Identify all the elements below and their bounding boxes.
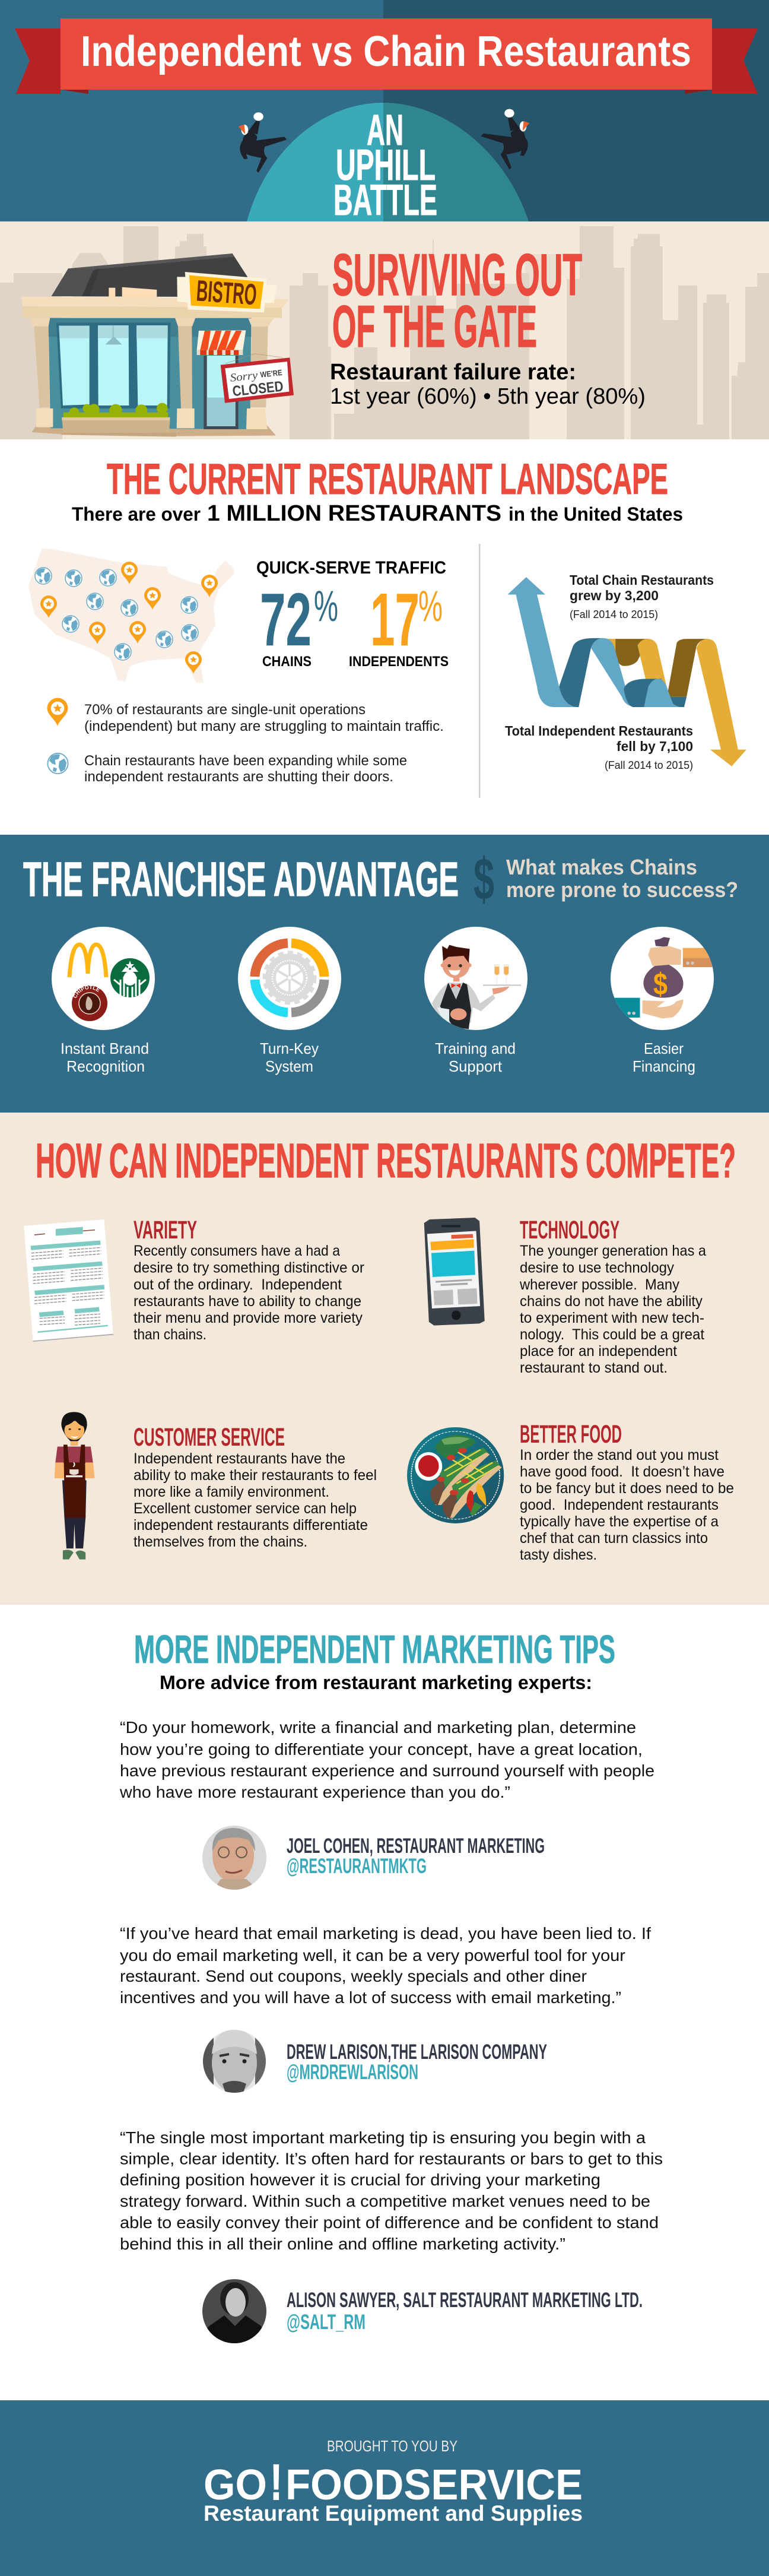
text block: failure rate: 1st year (60%) • 5th year (80%) — [330, 384, 646, 409]
text block: independent restaurants fell: Total Independent Restaurants — [505, 723, 693, 739]
heading: customer service: CUSTOMER SERVICE — [134, 1423, 285, 1452]
closed sign — [221, 357, 294, 403]
avatar: drew larison — [203, 2030, 266, 2093]
quote: alison sawyer: simple, clear identity. It’s often hard for restaurants or bars to get to this — [120, 2149, 663, 2168]
text block: customer service: Independent restaurants have the — [134, 1450, 345, 1467]
text block: technology: restaurant to stand out. — [520, 1360, 668, 1376]
quote: drew larison: restaurant. Send out coupons, weekly specials and other diner — [120, 1967, 587, 1985]
caption: easier financing: Financing — [633, 1057, 695, 1075]
text block: better food: In order the stand out you must — [520, 1447, 719, 1463]
quote: alison sawyer: strategy forward. Within such a competitive market venues need to be — [120, 2192, 650, 2210]
byline: joel cohen — [287, 1834, 545, 1878]
planter with bushes — [63, 403, 168, 419]
stat: 17% independents — [349, 578, 449, 670]
byline: drew larison — [287, 2040, 547, 2084]
caption: easier financing — [633, 1040, 695, 1075]
subheading: over 1 million restaurants — [72, 501, 683, 526]
hill text: an uphill battle: AN — [367, 106, 403, 154]
text block: single-unit operations: 70% of restaurants are single-unit operations — [84, 702, 366, 718]
text block: customer service: themselves from the chains. — [134, 1533, 307, 1550]
text block: better food — [520, 1447, 734, 1563]
text block: technology: place for an independent — [520, 1343, 677, 1360]
text block: independent restaurants fell: (Fall 2014 to 2015) — [605, 759, 693, 771]
quote: joel cohen: how you’re going to differentiate your concept, have a great location, — [120, 1740, 643, 1758]
text block: customer service — [134, 1450, 377, 1550]
first taco — [430, 1447, 490, 1506]
text block: independent restaurants fell: fell by 7,100 — [617, 739, 693, 754]
title text: Independent vs Chain Restaurants — [81, 28, 691, 75]
stat: 72% chains: % — [314, 582, 338, 630]
panel: surviving out of the gate background — [0, 221, 769, 439]
panel: how can independents compete — [0, 1113, 769, 1605]
text block: variety: restaurants have to ability to change — [134, 1293, 361, 1310]
icon: waiter with tray — [424, 927, 528, 1030]
caption: instant brand recognition — [61, 1040, 149, 1075]
icon: globe legend — [47, 753, 68, 774]
text: brought to you by: BROUGHT TO YOU BY — [327, 2437, 457, 2455]
panel: franchise advantage — [0, 835, 769, 1113]
stat: 72% chains: 72 — [260, 578, 312, 661]
text block: chains expanding: independent restaurants are shutting their doors. — [84, 769, 393, 785]
quote: alison sawyer — [120, 2128, 663, 2253]
text block: technology: to experiment with new tech- — [520, 1310, 704, 1326]
text block: customer service: more like a family environment. — [134, 1484, 329, 1500]
text block: better food: have good food. It doesn’t have — [520, 1463, 724, 1480]
bistro sign — [177, 272, 277, 312]
subheading: what makes chains: What makes Chains — [506, 855, 697, 879]
avatar: alison sawyer — [202, 2279, 266, 2343]
quote: drew larison — [120, 1924, 651, 2007]
caption: easier financing: Easier — [644, 1040, 684, 1057]
byline: alison sawyer: @SALT_RM — [287, 2311, 366, 2334]
quote: drew larison: “If you’ve heard that email marketing is dead, you have been lied to. If — [120, 1924, 651, 1943]
text block: independent restaurants fell — [505, 723, 693, 771]
byline: joel cohen: JOEL COHEN, RESTAURANT MARKETING — [287, 1834, 545, 1858]
text block: failure rate — [330, 360, 646, 409]
second taco — [443, 1460, 502, 1519]
subheading: more advice: More advice from restaurant marketing experts: — [160, 1672, 592, 1693]
quote: alison sawyer: “The single most important marketing tip is ensuring you begin with a — [120, 2128, 646, 2147]
stat: quick-serve traffic: QUICK-SERVE TRAFFIC — [256, 558, 446, 578]
byline: joel cohen: @RESTAURANTMKTG — [287, 1855, 427, 1878]
quote: drew larison: you do email marketing well, it can be a very powerful tool for your — [120, 1946, 625, 1965]
logo: go foodservice: GO — [204, 2461, 267, 2509]
text block: chain restaurants grew: Total Chain Restaurants — [570, 572, 714, 588]
text block: chains expanding — [84, 753, 407, 785]
logo: go foodservice: Restaurant Equipment and Supplies — [204, 2501, 583, 2526]
quote: alison sawyer: able to easily convey their point of difference and be confident to stand — [120, 2213, 659, 2232]
stat: 17% independents: % — [418, 582, 443, 630]
heading: variety: VARIETY — [134, 1216, 197, 1244]
icon: menu — [24, 1219, 114, 1342]
text block: chain restaurants grew: (Fall 2014 to 2015) — [570, 609, 658, 620]
heading: the franchise advantage: THE FRANCHISE ADVANTAGE — [23, 853, 459, 907]
caption: training and support — [435, 1040, 516, 1075]
caption: instant brand recognition: Recognition — [66, 1057, 145, 1075]
byline: alison sawyer — [287, 2289, 643, 2334]
stat: quick-serve traffic — [256, 558, 449, 670]
avatar: joel cohen — [202, 1826, 266, 1890]
icon: dollar sign: $ — [474, 846, 494, 912]
stat: 72% chains: CHAINS — [262, 654, 312, 670]
text block: technology: The younger generation has a — [520, 1243, 706, 1259]
text block: single-unit operations — [84, 702, 444, 734]
text block: better food: to be fancy but it does need to be — [520, 1480, 734, 1497]
caption: training and support: Training and — [435, 1040, 516, 1057]
text block: better food: typically have the expertise of a — [520, 1513, 719, 1530]
byline: drew larison: @MRDREWLARISON — [287, 2061, 418, 2084]
stat: 17% independents: INDEPENDENTS — [349, 654, 449, 670]
heading: surviving out of the gate: OF THE GATE — [332, 293, 537, 359]
byline: drew larison: DREW LARISON,THE LARISON COMPANY — [287, 2040, 547, 2064]
caption: turn-key system: System — [265, 1057, 313, 1075]
columns — [29, 318, 274, 429]
text block: better food: tasty dishes. — [520, 1547, 597, 1563]
hill — [247, 103, 529, 221]
closed sign: WE'RE — [260, 368, 282, 379]
map: united states with pins and globes — [28, 549, 234, 683]
illustration: waitress with coffee — [55, 1412, 94, 1560]
text block: technology: desire to use technology — [520, 1260, 674, 1276]
illustration: plate of tacos — [407, 1427, 504, 1523]
quote: joel cohen: “Do your homework, write a financial and marketing plan, determine — [120, 1718, 636, 1737]
icon: climbing waiter left — [239, 112, 287, 173]
text block: variety — [134, 1243, 364, 1343]
text block: single-unit operations: (independent) but many are struggling to maintain traffic. — [84, 718, 444, 734]
subheading: over 1 million restaurants: There are over — [72, 503, 201, 525]
caption: instant brand recognition: Instant Brand — [61, 1040, 149, 1057]
text block: variety: Recently consumers have a had a — [134, 1243, 340, 1259]
quote: alison sawyer: behind this in all their online and offline marketing activity.” — [120, 2235, 565, 2253]
logo: go foodservice: ! — [271, 2454, 282, 2510]
text block: customer service: ability to make their restaurants to feel — [134, 1467, 377, 1484]
stat: 17% independents: 17 — [370, 578, 420, 661]
chart: rising and falling ribbon arrows — [507, 577, 746, 766]
text block: chains expanding: Chain restaurants have been expanding while some — [84, 753, 407, 769]
quote: joel cohen: have previous restaurant experience and surround yourself with people — [120, 1761, 654, 1780]
roof — [52, 254, 247, 297]
quote: alison sawyer: defining position however it is crucial for driving your marketing — [120, 2171, 600, 2189]
awning — [197, 330, 246, 355]
subheading: what makes chains: more prone to success? — [506, 877, 738, 902]
illustration: closed bistro storefront — [21, 254, 294, 437]
text block: variety: than chains. — [134, 1326, 206, 1343]
text block: variety: their menu and provide more variety — [134, 1310, 363, 1326]
icon: brand logos — [52, 927, 155, 1030]
hill text: an uphill battle: UPHILL — [336, 141, 436, 189]
closed sign: Sorry — [230, 369, 259, 385]
text block: technology: wherever possible. Many — [519, 1276, 679, 1293]
caption: turn-key system: Turn-Key — [260, 1040, 319, 1057]
icon: smartphone — [424, 1218, 485, 1326]
text block: chain restaurants grew: grew by 3,200 — [570, 588, 659, 603]
closed sign: CLOSED — [231, 379, 284, 400]
door — [204, 356, 239, 429]
heading: technology: TECHNOLOGY — [520, 1216, 619, 1244]
caption: training and support: Support — [449, 1057, 503, 1075]
panel: footer — [0, 2400, 769, 2576]
icon: turn-key cycle with gear — [238, 927, 341, 1030]
icon: brand logos: CHIPOTLE — [74, 986, 100, 998]
icon: pin legend — [47, 698, 68, 726]
text block: customer service: independent restaurants differentiate — [134, 1517, 368, 1533]
hill text: an uphill battle: BATTLE — [333, 176, 437, 224]
icon: climbing waiter right — [481, 109, 529, 169]
title ribbon — [15, 18, 758, 94]
text block: variety: out of the ordinary. Independent — [134, 1276, 342, 1293]
header background — [0, 0, 769, 221]
caption: turn-key system — [260, 1040, 319, 1075]
quote: joel cohen: who have more restaurant experience than you do.” — [119, 1783, 510, 1801]
text block: better food: chef that can turn classics into — [520, 1530, 708, 1547]
text block: chain restaurants grew — [570, 572, 714, 620]
logo: go foodservice: FOODSERVICE — [285, 2461, 583, 2509]
heading: better food: BETTER FOOD — [520, 1420, 622, 1449]
subheading: over 1 million restaurants: in the United States — [509, 503, 683, 525]
text block: variety: desire to try something distinctive or — [134, 1260, 364, 1276]
icon: money bag hand-off: $ — [653, 967, 668, 1002]
bistro sign: BISTRO — [195, 274, 258, 311]
heading: surviving out of the gate — [332, 242, 582, 359]
quote: drew larison: incentives and you will have a lot of success with email marketing.” — [120, 1988, 621, 2007]
text block: better food: good. Independent restaurants — [520, 1497, 719, 1513]
text block: technology — [519, 1243, 706, 1376]
icon: money bag hand-off — [611, 927, 714, 1030]
text block: technology: chains do not have the ability — [520, 1293, 703, 1310]
quote: joel cohen — [119, 1718, 654, 1801]
text block: failure rate: Restaurant failure rate: — [330, 360, 576, 385]
text block: customer service: Excellent customer service can help — [134, 1500, 357, 1517]
logo: go foodservice — [204, 2454, 583, 2526]
subheading: over 1 million restaurants: 1 MILLION RESTAURANTS — [207, 501, 501, 526]
hill text: an uphill battle — [333, 106, 437, 224]
subheading: what makes chains — [506, 855, 738, 902]
text block: technology: nology. This could be a great — [520, 1326, 704, 1343]
